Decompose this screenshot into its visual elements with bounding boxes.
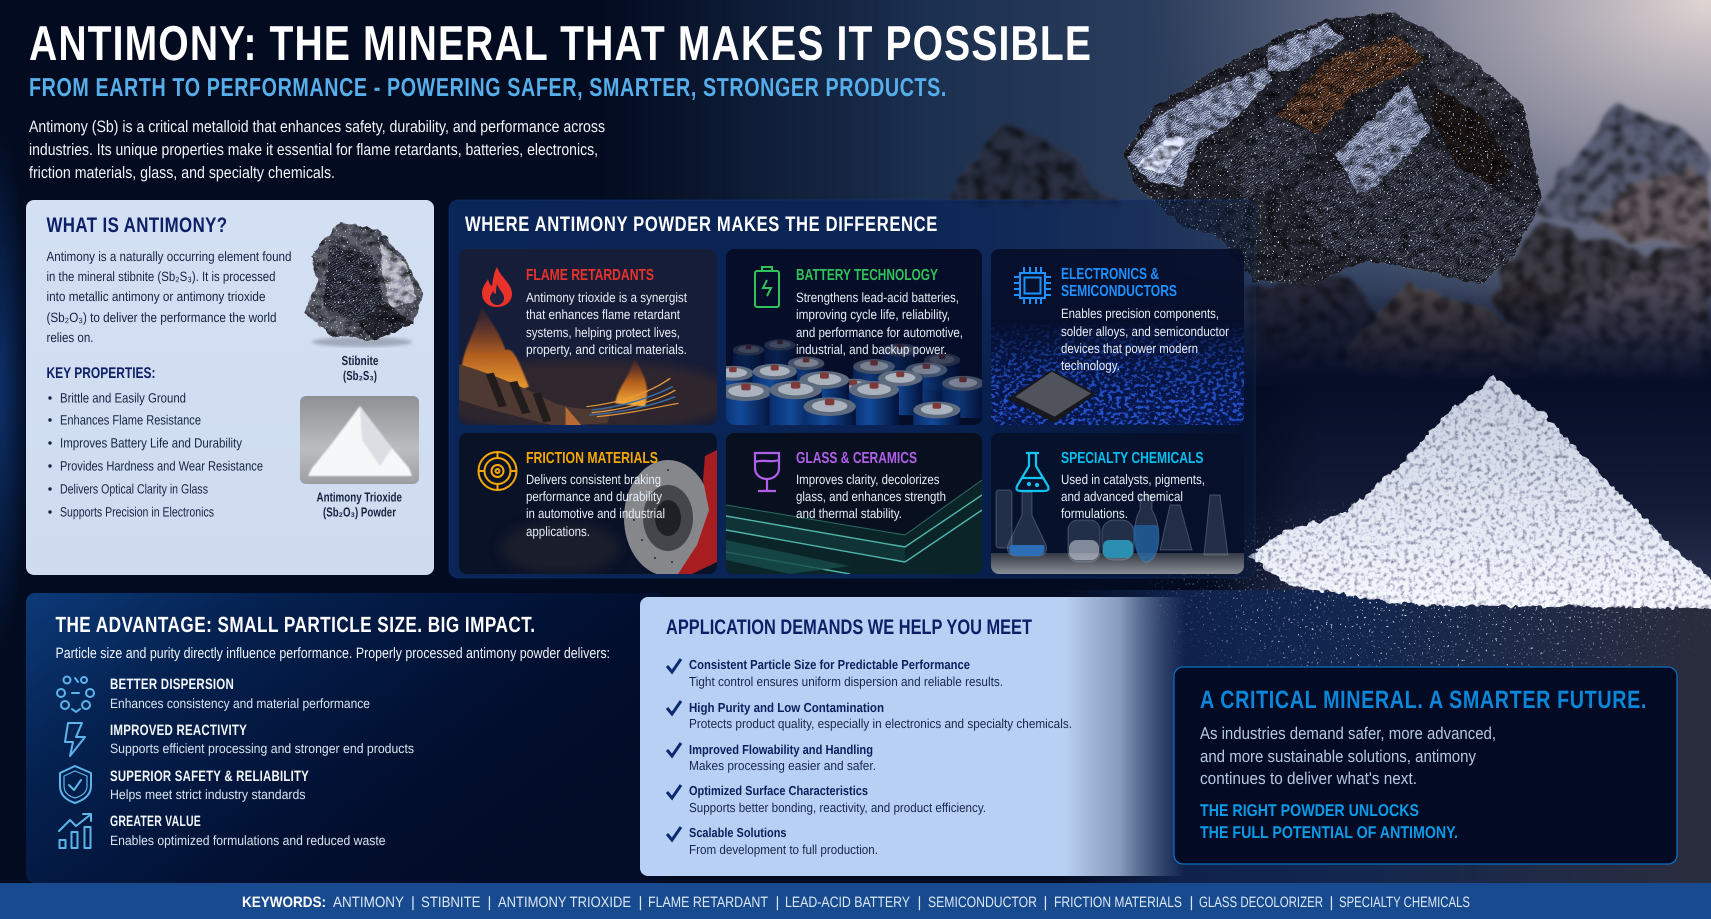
item: better dispersion	[57, 676, 370, 712]
item: surface characteristics: Optimized Surface Characteristics	[689, 783, 868, 798]
image: circuit board	[991, 324, 1244, 425]
item: flowability: Improved Flowability and Handling	[689, 742, 873, 757]
card heading: FLAME RETARDANTS	[526, 267, 654, 284]
intro text: industries. Its unique properties make it essential for flame retardants, batteries, electronics,	[29, 141, 598, 159]
footer: keywords: |	[918, 894, 921, 911]
heading: what is antimony: WHAT IS ANTIMONY?	[46, 214, 228, 237]
icon: chip	[1014, 267, 1051, 304]
footer: keywords: |	[1330, 894, 1333, 911]
card text: systems, helping protect lives,	[526, 325, 680, 340]
card heading: SEMICONDUCTORS	[1061, 283, 1177, 300]
item: greater value	[59, 813, 386, 848]
card text: Antimony trioxide is a synergist	[526, 290, 687, 305]
item: surface characteristics	[667, 783, 986, 815]
item: improved reactivity	[65, 722, 414, 756]
card text: in automotive and industrial	[526, 506, 665, 521]
text: advantage intro: Particle size and purity directly influence performance. Properly processed antimony powder delivers:	[56, 645, 610, 662]
callout tagline	[1200, 801, 1458, 842]
card text	[1061, 472, 1205, 521]
card text: industrial, and backup power.	[796, 342, 947, 357]
card text: improving cycle life, reliability,	[796, 307, 950, 322]
footer: keywords: |	[1044, 894, 1047, 911]
footer: keywords: FLAME RETARDANT	[648, 894, 768, 911]
background rocks	[946, 105, 1711, 372]
rock fade to dark	[1100, 290, 1711, 385]
card text	[796, 290, 963, 357]
heading: advantage: THE ADVANTAGE: SMALL PARTICLE SIZE. BIG IMPACT.	[56, 612, 536, 637]
footer: keywords: |	[638, 894, 642, 911]
card text: and thermal stability.	[796, 506, 902, 521]
callout text: As industries demand safer, more advanced,	[1200, 724, 1496, 743]
panel: where antimony powder makes the difference	[424, 200, 1255, 578]
list: key properties: Brittle and Easily Ground	[60, 390, 186, 406]
card heading: GLASS & CERAMICS	[796, 450, 917, 467]
item: superior safety: Helps meet strict industry standards	[110, 787, 306, 802]
footer: keywords: |	[488, 894, 491, 911]
caption: powder	[316, 490, 402, 520]
item: scalable solutions: From development to full production.	[689, 842, 878, 857]
heading: key properties: KEY PROPERTIES:	[46, 365, 156, 382]
image: antimony trioxide powder	[300, 396, 419, 484]
main stibnite rock	[1123, 12, 1542, 285]
card: specialty chemicals	[991, 433, 1244, 574]
background scene	[0, 0, 1711, 620]
footer: keywords: SPECIALTY CHEMICALS	[1339, 894, 1470, 911]
image: batteries	[726, 340, 982, 425]
callout text	[1200, 724, 1496, 788]
callout text: continues to deliver what's next.	[1200, 769, 1417, 788]
icon: dispersion	[57, 676, 94, 712]
card text: Delivers consistent braking	[526, 472, 661, 487]
subtitle: FROM EARTH TO PERFORMANCE - POWERING SAFER, SMARTER, STRONGER PRODUCTS.	[29, 72, 947, 102]
item: superior safety: SUPERIOR SAFETY & RELIABILITY	[110, 768, 309, 785]
heading: application demands: APPLICATION DEMANDS WE HELP YOU MEET	[666, 616, 1032, 639]
footer: keywords: LEAD-ACID BATTERY	[785, 894, 910, 911]
item: improved reactivity: Supports efficient processing and stronger end products	[110, 741, 414, 756]
icon: battery	[755, 267, 779, 307]
list: key properties: Delivers Optical Clarity in Glass	[60, 482, 208, 496]
footer: keywords: |	[411, 894, 415, 911]
card text: and performance for automotive,	[796, 325, 963, 340]
item: scalable solutions: Scalable Solutions	[689, 825, 786, 840]
foreground rocks	[1347, 237, 1711, 376]
icon: friction target	[478, 452, 516, 490]
callout: a critical mineral	[1174, 667, 1677, 864]
text: description: into metallic antimony or antimony trioxide	[46, 289, 266, 304]
card text: Enables precision components,	[1061, 306, 1219, 321]
icon: lightning bolt	[65, 723, 85, 756]
footer: keywords: FRICTION MATERIALS	[1054, 894, 1182, 911]
card text	[1061, 306, 1229, 373]
card text: technology.	[1061, 358, 1120, 373]
item: consistent particle size	[667, 657, 1003, 689]
footer: keywords: GLASS DECOLORIZER	[1199, 894, 1323, 911]
card text: applications.	[526, 524, 590, 539]
card text: Used in catalysts, pigments,	[1061, 472, 1205, 487]
icon: growth chart	[59, 814, 91, 848]
item: high purity	[667, 700, 1072, 731]
item: greater value: GREATER VALUE	[110, 813, 201, 830]
item: scalable solutions	[667, 825, 878, 857]
footer: keywords: ANTIMONY	[333, 894, 404, 911]
item: consistent particle size: Consistent Particle Size for Predictable Performance	[689, 657, 970, 672]
list: key properties: Enhances Flame Resistance	[60, 412, 201, 428]
intro text: Antimony (Sb) is a critical metalloid that enhances safety, durability, and performance across	[29, 118, 605, 136]
list: key properties	[48, 390, 263, 520]
card heading: SPECIALTY CHEMICALS	[1061, 450, 1204, 467]
icon: shield	[60, 766, 91, 803]
card heading	[1061, 266, 1177, 300]
panel: what is antimony	[26, 200, 434, 575]
item: greater value: Enables optimized formulations and reduced waste	[110, 833, 386, 848]
text: description: (Sb₂O₃) to deliver the performance the world	[46, 310, 276, 325]
footer: keywords: SEMICONDUCTOR	[928, 894, 1037, 911]
card text: formulations.	[1061, 506, 1128, 521]
card: glass and ceramics	[726, 433, 982, 574]
item: surface characteristics: Supports better bonding, reactivity, and product efficiency.	[689, 800, 986, 815]
image: lab flasks	[991, 490, 1244, 574]
item: consistent particle size: Tight control ensures uniform dispersion and reliable results.	[689, 674, 1003, 689]
icon: wine glass	[755, 453, 779, 491]
text: description: relies on.	[46, 330, 94, 345]
intro text: friction materials, glass, and specialty chemicals.	[29, 164, 335, 182]
list: key properties: Improves Battery Life and Durability	[60, 436, 242, 450]
item: better dispersion: Enhances consistency and material performance	[110, 696, 370, 711]
lower scene	[1060, 385, 1711, 885]
callout tagline: THE FULL POTENTIAL OF ANTIMONY.	[1200, 823, 1458, 842]
image: burning cable	[424, 307, 738, 433]
item: better dispersion: BETTER DISPERSION	[110, 676, 234, 693]
card: electronics and semiconductors	[991, 249, 1244, 425]
list: key properties: Supports Precision in Electronics	[60, 504, 214, 520]
item: flowability: Makes processing easier and safer.	[689, 758, 876, 773]
card text: Improves clarity, decolorizes	[796, 472, 940, 487]
card: battery technology	[726, 249, 982, 425]
image: glass sheets	[726, 480, 982, 574]
item: high purity: High Purity and Low Contamination	[689, 700, 884, 715]
card text: glass, and enhances strength	[796, 489, 946, 504]
item: improved reactivity: IMPROVED REACTIVITY	[110, 722, 247, 739]
footer: keywords: |	[776, 894, 779, 911]
panel: the advantage	[26, 593, 666, 883]
image: brake disc	[500, 450, 717, 576]
card text: solder alloys, and semiconductor	[1061, 324, 1229, 339]
card text: performance and durability	[526, 489, 662, 504]
card text: property, and critical materials.	[526, 342, 687, 357]
caption: stibnite	[342, 353, 378, 383]
card: friction materials	[459, 433, 717, 576]
footer: keywords: |	[1190, 894, 1193, 911]
image: stibnite	[304, 222, 423, 347]
icon: flask	[1016, 453, 1048, 491]
card heading: BATTERY TECHNOLOGY	[796, 267, 938, 284]
callout text: and more sustainable solutions, antimony	[1200, 747, 1476, 766]
card heading: FRICTION MATERIALS	[526, 450, 658, 467]
card text	[526, 472, 665, 539]
panel: application demands	[640, 597, 1200, 876]
card text: that enhances flame retardant	[526, 307, 680, 322]
callout tagline: THE RIGHT POWDER UNLOCKS	[1200, 801, 1419, 820]
text: description: Antimony is a naturally occurring element found	[46, 249, 292, 264]
list: key properties: Provides Hardness and Wear Resistance	[60, 458, 263, 474]
caption: stibnite: (Sb₂S₃)	[343, 368, 377, 383]
icon: flame	[482, 267, 512, 307]
footer: keywords: ANTIMONY TRIOXIDE	[498, 894, 631, 911]
card text: Strengthens lead-acid batteries,	[796, 290, 959, 305]
footer: keywords: STIBNITE	[421, 894, 480, 911]
card text	[796, 472, 946, 521]
card: flame retardants	[459, 249, 717, 425]
footer: keywords	[0, 883, 1711, 919]
powder pile	[1141, 375, 1711, 666]
title: ANTIMONY: THE MINERAL THAT MAKES IT POSSIBLE	[29, 17, 1092, 71]
heading: where: WHERE ANTIMONY POWDER MAKES THE DIFFERENCE	[465, 213, 938, 236]
text: description	[46, 249, 292, 345]
caption: powder: (Sb₂O₃) Powder	[323, 504, 396, 520]
item: superior safety	[60, 766, 309, 803]
item: flowability	[667, 742, 876, 773]
intro text	[29, 118, 605, 182]
card heading: ELECTRONICS &	[1061, 266, 1159, 283]
caption: powder: Antimony Trioxide	[316, 490, 402, 504]
caption: stibnite: Stibnite	[342, 353, 378, 368]
card text: and advanced chemical	[1061, 489, 1183, 504]
text: description: in the mineral stibnite (Sb₂S₃). It is processed	[46, 269, 276, 284]
footer: keywords: KEYWORDS:	[242, 894, 326, 911]
item: high purity: Protects product quality, especially in electronics and specialty chemicals.	[689, 716, 1072, 731]
card text	[526, 290, 687, 357]
card text: devices that power modern	[1061, 341, 1198, 356]
